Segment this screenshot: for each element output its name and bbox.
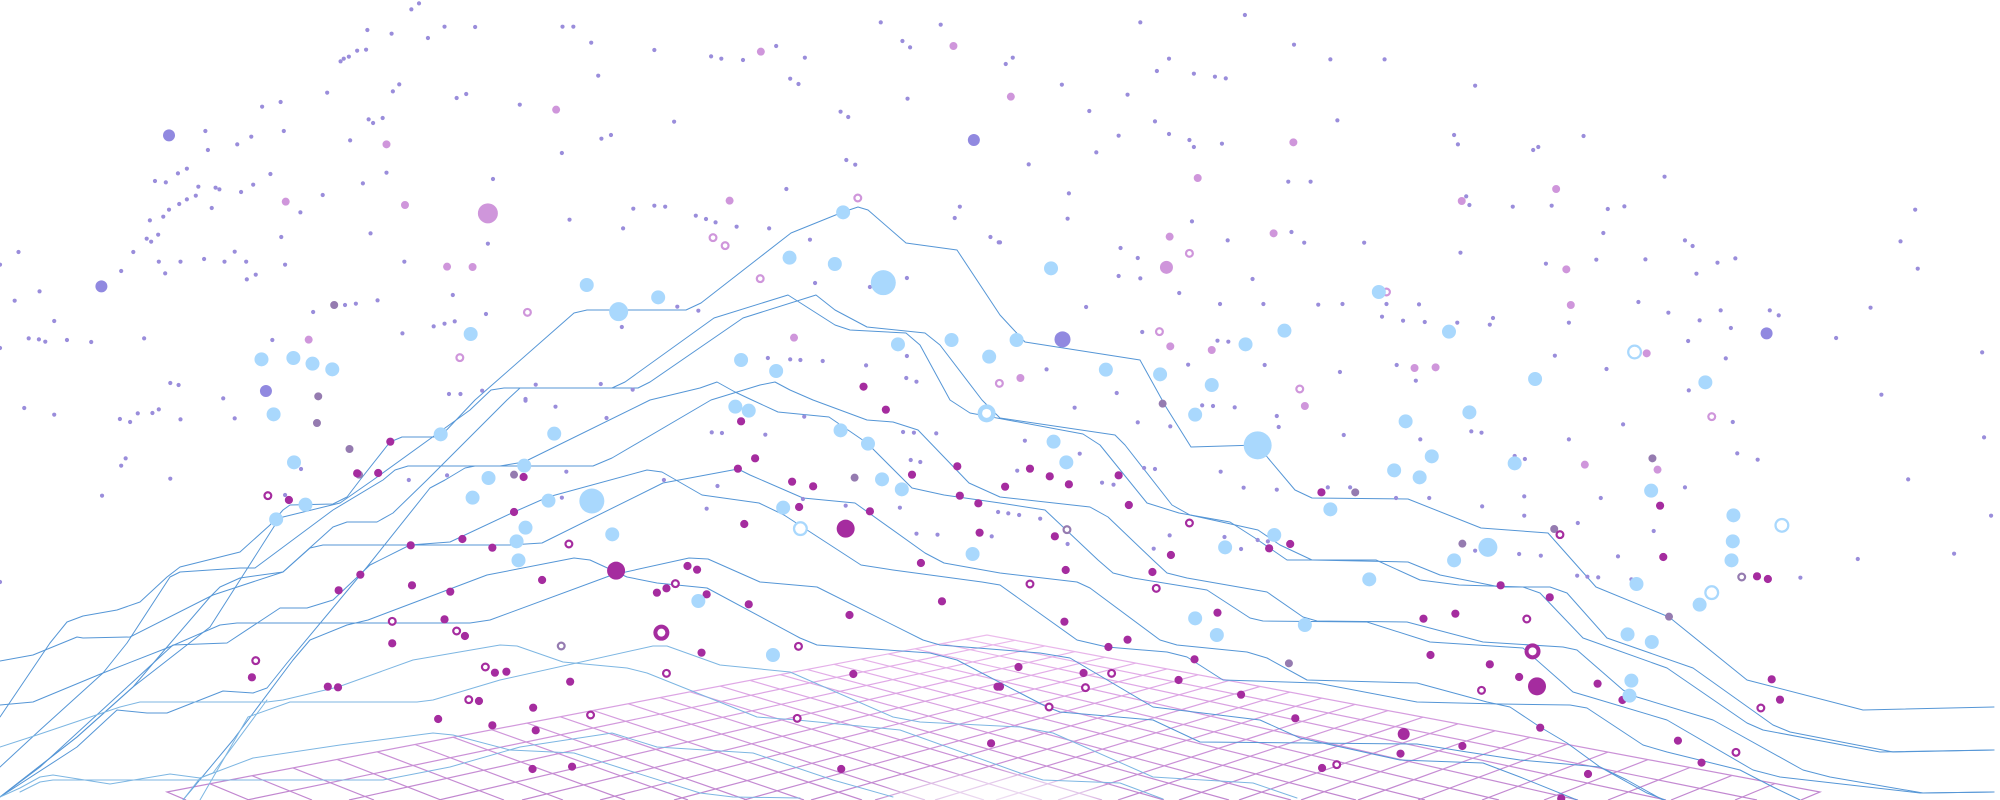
scatter dots: upper right [1000, 15, 1982, 395]
perspective grid floor [167, 635, 1820, 800]
scatter dots: upper left [0, 3, 999, 399]
flowing contour lines [0, 207, 1994, 800]
pale fade at the grid's lower centre [870, 768, 1130, 800]
scatter dots: lower left [0, 401, 998, 769]
scatter dots: lower right [1000, 404, 1991, 798]
